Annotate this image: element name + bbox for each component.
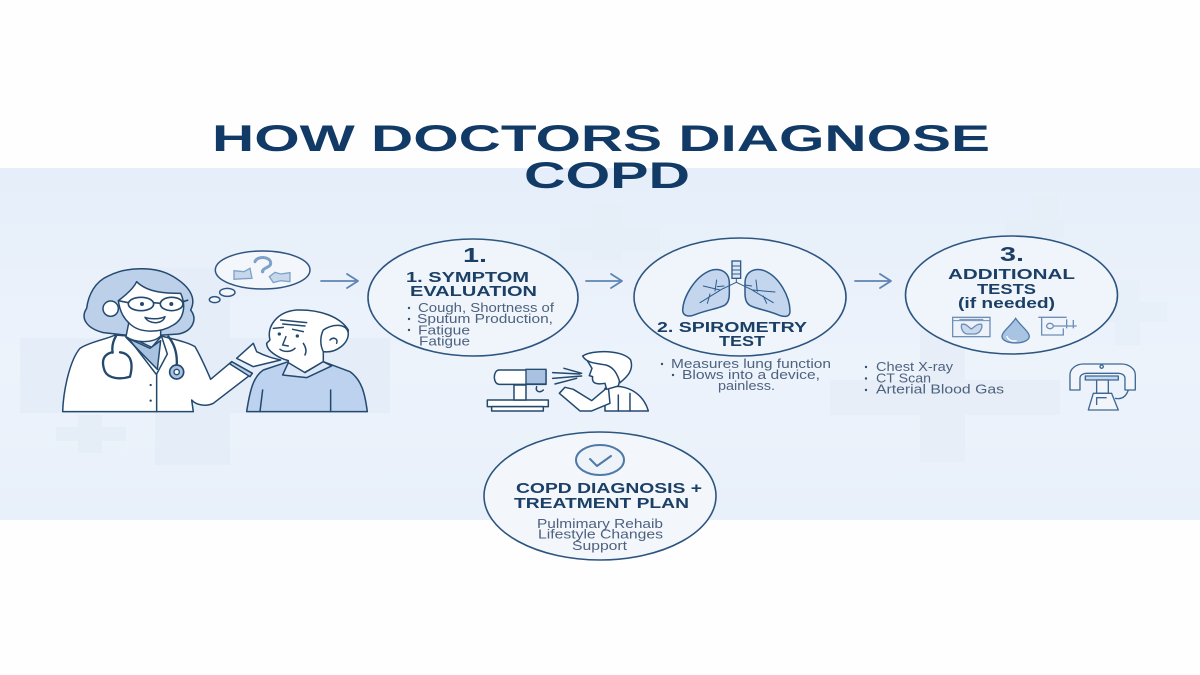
title: HOW DOCTORS DIAGNOSE — [212, 117, 990, 159]
background band — [0, 168, 1200, 520]
step 3 circle: 3. — [1000, 244, 1024, 266]
title — [212, 117, 990, 196]
outcome circle: Support — [572, 539, 628, 553]
list: additional tests: Chest X-ray — [876, 360, 954, 374]
step 3 circle — [906, 236, 1118, 354]
step 2 circle: TEST — [719, 333, 765, 350]
list: spirometry — [661, 357, 831, 393]
step 1 circle: 1. SYMPTOM — [406, 269, 529, 286]
step 1 circle: Fatigue — [419, 334, 470, 348]
icon: check mark — [576, 445, 624, 475]
list: spirometry: Measures lung function — [671, 357, 831, 371]
outcome circle: Pulmimary Rehaib — [537, 517, 663, 531]
step 1 circle: Fatigue — [418, 324, 470, 338]
list: additional tests — [865, 360, 1004, 396]
outcome circle: COPD DIAGNOSIS + — [516, 480, 702, 497]
illustration: CT scanner — [1070, 364, 1135, 410]
step 3 circle: (if needed) — [958, 295, 1055, 312]
outcome circle: TREATMENT PLAN — [514, 495, 689, 512]
list: spirometry: painless. — [718, 379, 775, 393]
outcome circle — [484, 432, 716, 560]
thought bubble with question mark — [209, 251, 310, 303]
icons: x-ray, blood drop, blood gas — [953, 317, 1077, 343]
list: spirometry: Blows into a device, — [682, 368, 820, 382]
step 3 circle: ADDITIONAL — [948, 266, 1075, 283]
icon: lungs — [683, 261, 790, 316]
step 1 circle: EVALUATION — [410, 283, 537, 300]
illustration: person blowing into spirometer — [487, 352, 648, 411]
step 2 circle — [634, 238, 846, 356]
step 3 circle: TESTS — [977, 281, 1036, 298]
illustration: patient — [247, 310, 367, 412]
list: additional tests: CT Scan — [876, 372, 931, 386]
arrow 1 — [321, 274, 358, 288]
illustration: doctor — [63, 269, 281, 412]
step 1 circle — [368, 239, 578, 356]
outcome circle: Lifestyle Changes — [538, 528, 663, 542]
arrow 3 — [855, 274, 891, 288]
step 1 circle: Cough, Shortness of — [418, 301, 555, 315]
step 1 circle: 1. — [463, 245, 487, 267]
arrow 2 — [586, 274, 622, 288]
step 1 circle: Sputum Production, — [417, 312, 553, 326]
title: COPD — [524, 154, 690, 196]
step 2 circle: 2. SPIROMETRY — [657, 319, 807, 336]
list: additional tests: Arterial Blood Gas — [876, 382, 1004, 396]
